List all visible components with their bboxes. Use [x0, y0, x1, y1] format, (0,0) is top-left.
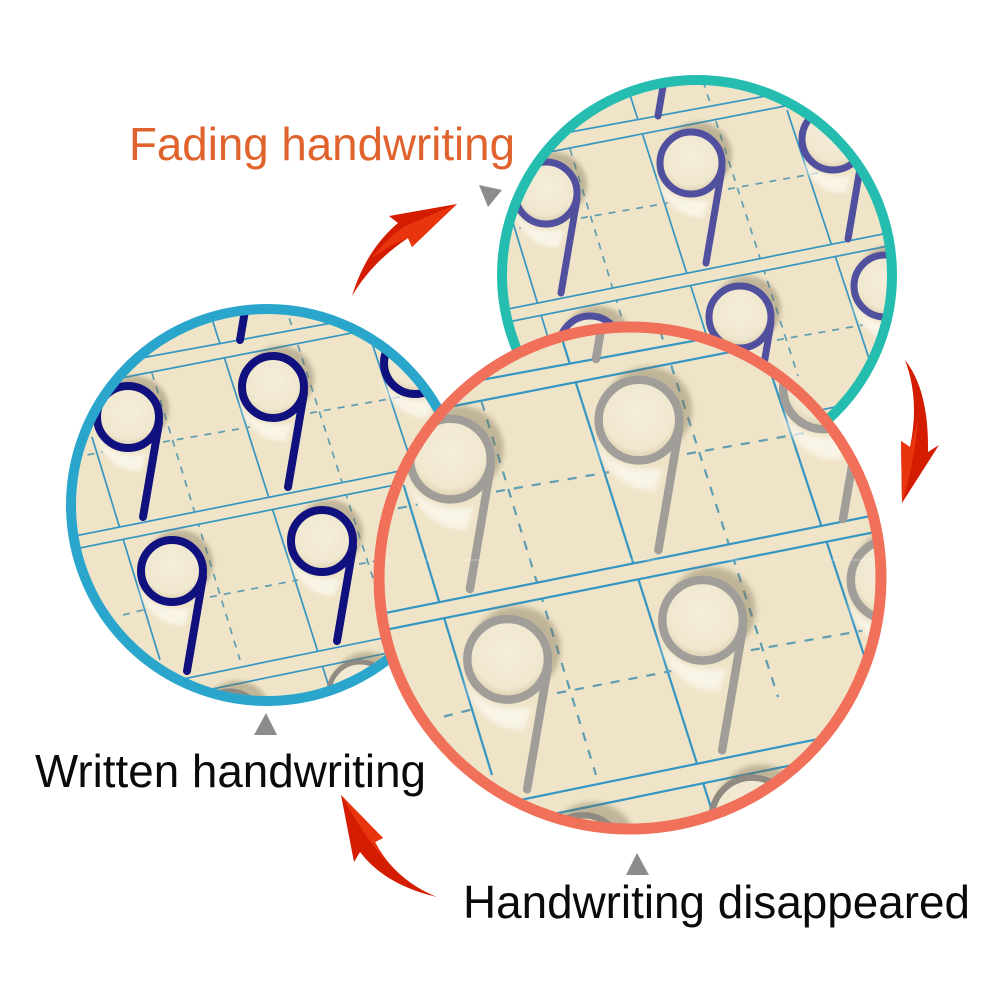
icon: grey pointer to coral circle [626, 853, 649, 875]
icon: grey pointer to teal circle [479, 185, 502, 207]
panel: handwriting disappeared circle (coral ring) [374, 322, 886, 834]
heading: Fading handwriting: Fading handwriting [129, 118, 515, 170]
arrow: teal circle to coral circle [901, 360, 939, 503]
icon: grey pointer to blue circle [254, 713, 277, 735]
heading: Handwriting disappeared: Handwriting disappeared [463, 876, 970, 928]
panel: written handwriting circle (blue ring) [66, 304, 441, 706]
arrow: coral circle to blue circle [341, 795, 437, 897]
panel: fading handwriting circle (teal ring) [497, 75, 897, 422]
arrow: blue circle to teal circle [352, 204, 457, 296]
heading: Written handwriting: Written handwriting [35, 745, 426, 797]
